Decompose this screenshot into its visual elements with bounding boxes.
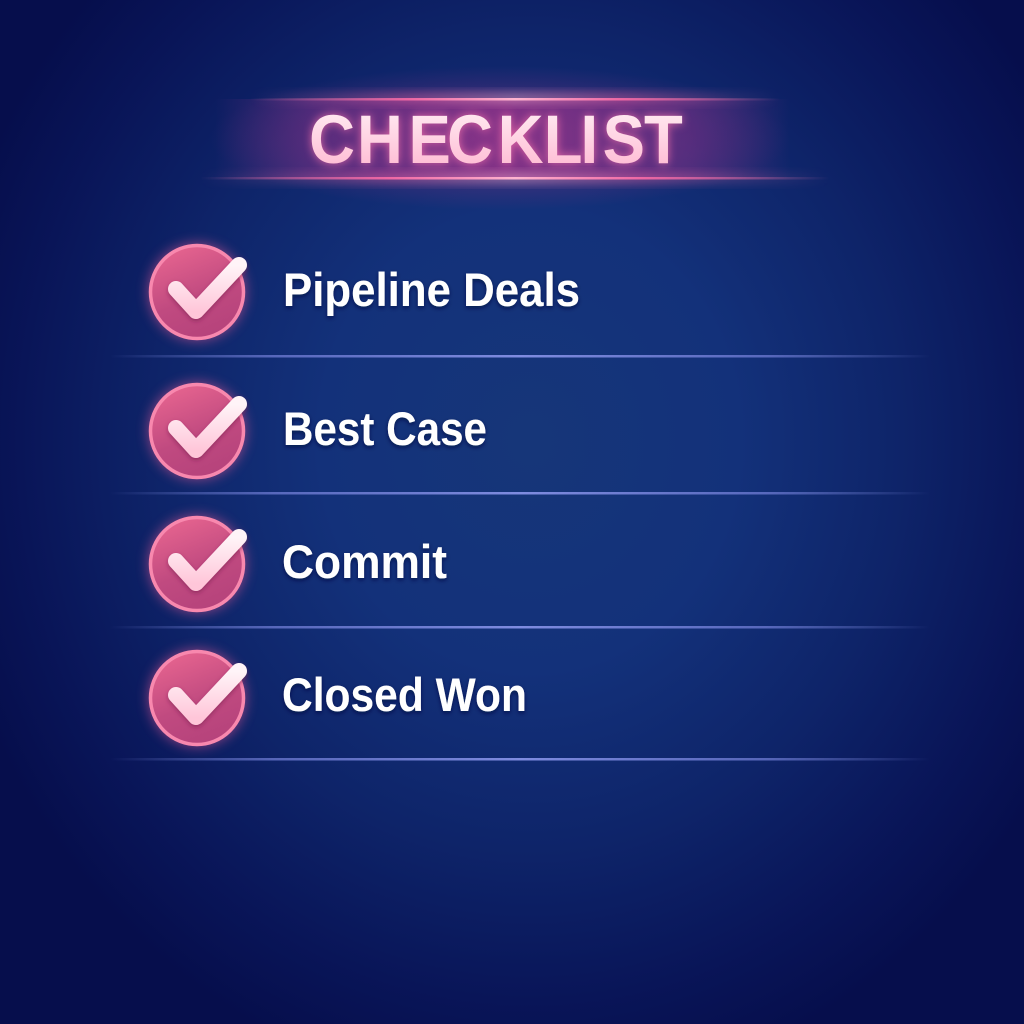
title glow band <box>215 99 790 179</box>
title: CHECKLIST <box>309 102 683 179</box>
checklist row: Commit <box>148 515 447 613</box>
title bottom glow line <box>200 173 830 183</box>
title banner <box>200 66 830 210</box>
label: Closed Won: Closed Won <box>282 668 527 721</box>
title: CHECKLIST <box>309 102 683 179</box>
icon: check mark <box>148 243 246 341</box>
checklist row: Pipeline Deals <box>148 243 580 341</box>
title top glow line <box>250 93 780 103</box>
label: Commit: Commit <box>282 535 447 588</box>
icon: check mark <box>148 382 246 480</box>
title outer glow <box>210 66 790 210</box>
label: Best Case: Best Case <box>283 402 487 455</box>
checklist row: Closed Won <box>148 649 527 747</box>
icon: check mark <box>148 515 246 613</box>
icon: check mark <box>148 649 246 747</box>
checklist row: Best Case <box>148 382 487 480</box>
label: Pipeline Deals: Pipeline Deals <box>283 263 580 316</box>
